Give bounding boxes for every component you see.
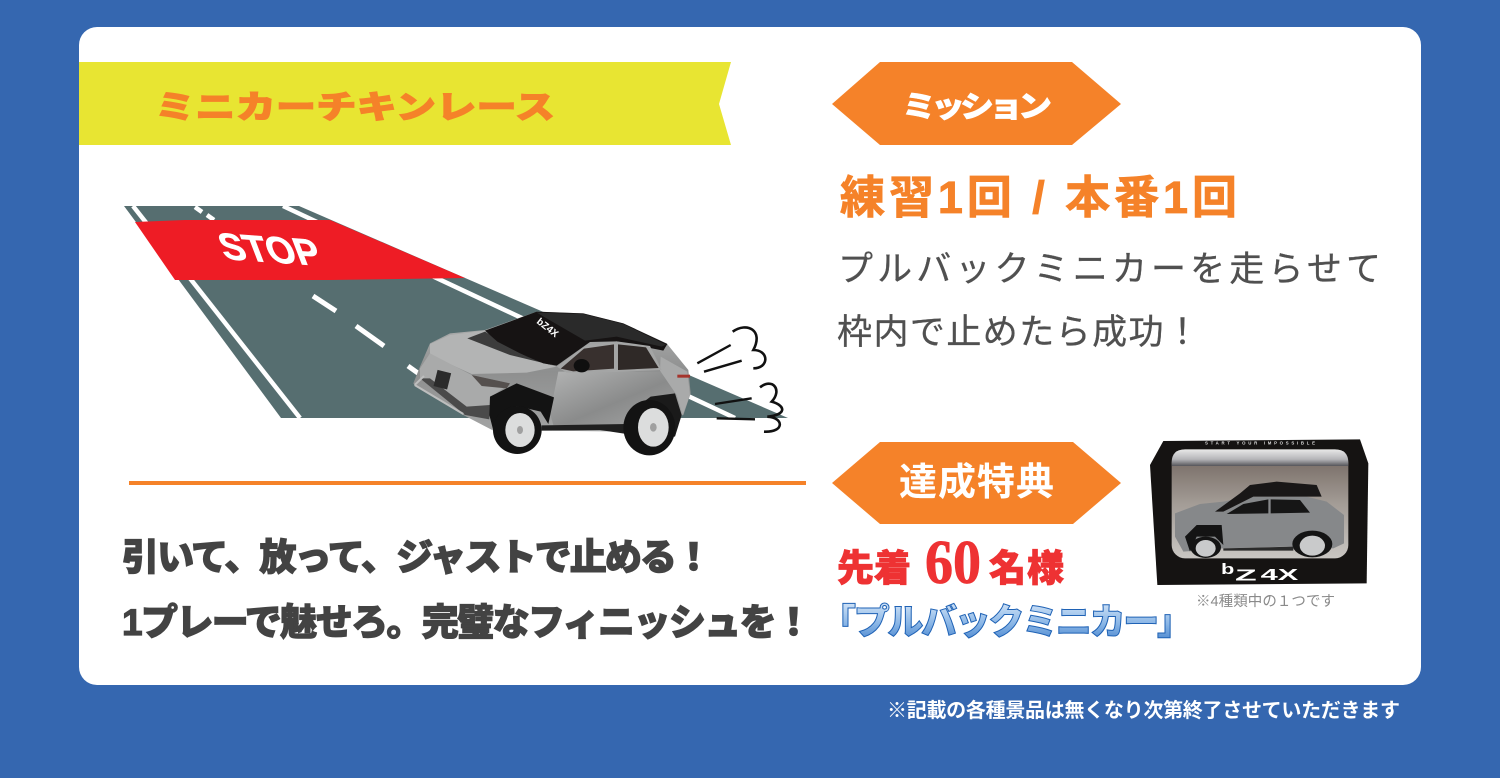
first 60 people: 名様 [989,548,1064,589]
mission description: プルバックミニカーを走らせて [838,250,1381,289]
prize photo: boxed toy car: START YOUR IMPOSSIBLE [1205,440,1315,445]
mission description [837,250,1381,352]
rear wheel arch [627,393,682,437]
boxed car [1175,497,1344,552]
mission description: 枠内で止めたら成功！ [837,313,1200,352]
front black fender [489,383,554,431]
sill [542,424,627,434]
box logo: b [1221,562,1234,578]
reward badge [832,442,1121,524]
stop zone: STOP [212,226,328,275]
divider line [129,481,806,485]
catch copy: 引いて、放って、ジャストで止める！ [122,537,712,578]
side windows [561,344,614,371]
box logo: 4X [1261,567,1300,584]
mission badge [832,62,1121,145]
mission count: 練習1回 / 本番1回 [840,172,1237,223]
prize photo: boxed toy car [1150,439,1368,585]
mission badge: ミッション [902,90,1052,124]
body [413,312,691,432]
title banner: ミニカーチキンレース [155,89,555,125]
pull-back minicar text: 「プルバックミニカー」 [820,601,1193,642]
door panels [550,372,677,425]
illustration: toy car [413,312,782,455]
front wheel [493,406,542,454]
headlight [472,375,510,388]
reward badge: 達成特典 [899,462,1054,504]
stop zone [135,220,465,280]
roof and windshield [485,312,667,366]
motion puffs [697,327,782,432]
prize note: ※4種類中の１つです [1196,593,1335,610]
first 60 people [837,529,1064,597]
box logo: Z [1235,568,1257,585]
white card panel [79,27,1421,685]
rear wheel [623,400,675,455]
first 60 people: 先着 [837,548,911,589]
illustration: road with stop zone [124,206,788,418]
title banner [79,62,731,145]
first 60 people: 60 [925,529,981,597]
illustration: toy car: bZ4X [534,316,560,340]
footer note: ※記載の各種景品は無くなり次第終了させていただきます [887,698,1400,722]
catch copy [122,537,812,643]
window [1172,449,1348,558]
mirror [574,359,590,372]
hood [430,331,557,374]
front face and grille [420,353,510,419]
tail light [677,375,690,378]
catch copy: 1プレーで魅せろ。完璧なフィニッシュを！ [122,602,812,643]
box logo [1221,562,1300,585]
